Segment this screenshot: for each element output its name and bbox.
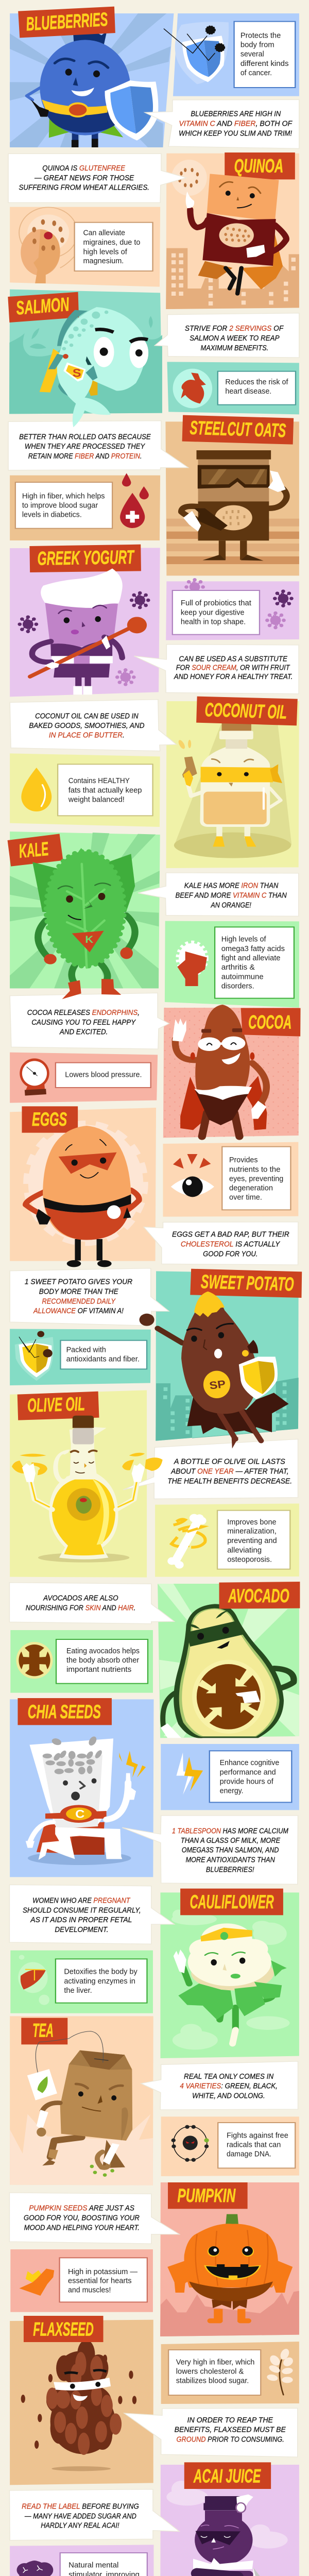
panel: liver detox fact	[10, 1951, 153, 2013]
character: cocoa hero	[173, 1005, 267, 1137]
panel: eye health fact: over time.	[229, 1194, 262, 1201]
title: olive oil: OLIVE OIL	[27, 1393, 85, 1416]
panel: nutrient absorption fact	[10, 1630, 153, 1693]
callout: pregnant women	[9, 1885, 175, 1944]
panel: olive oil hero	[10, 1390, 147, 1578]
title: eggs	[22, 1106, 78, 1133]
title: salmon: SALMON	[15, 293, 71, 319]
callout: cholesterol: CHOLESTEROL IS ACTUALLY	[181, 1240, 281, 1248]
callout: recommended daily allowance: 1 SWEET POTATO GIVES YOUR	[25, 1278, 132, 1286]
panel: migraines fact: migraines, due to	[83, 239, 140, 247]
section: olive oil	[10, 1390, 299, 1578]
section: flaxseed	[10, 2316, 299, 2485]
panel: cholesterol fact	[161, 2342, 299, 2404]
title: avocado	[219, 1582, 300, 1609]
panel: omega3 fact: disorders.	[221, 982, 254, 990]
panel: cancer protection fact: Protects the	[241, 31, 281, 40]
callout: recommended daily allowance: BODY MORE THAN THE	[39, 1288, 118, 1296]
callout: tablespoon calcium: MORE ANTIOXIDANTS THAN	[185, 1856, 275, 1864]
panel: potassium fact: and muscles!	[68, 2286, 111, 2294]
callout: skin and hair: AVOCADOS ARE ALSO	[43, 1595, 118, 1602]
callout: rolled oats comparison: WHEN THEY ARE PROCESSED THEY	[25, 443, 145, 451]
section: tea	[10, 2016, 299, 2185]
panel: cancer protection fact: body from	[241, 41, 274, 49]
callout: gluten free: SUFFERING FROM WHEAT ALLERGIES.	[19, 183, 149, 192]
callout: four varieties: WHITE, AND OOLONG.	[192, 2092, 265, 2100]
callout: skin and hair: NOURISHING FOR SKIN AND HAIR.	[26, 1604, 135, 1612]
panel: cholesterol fact: stabilizes blood sugar.	[176, 2377, 249, 2385]
callout: vitamin c and fiber: BLUEBERRIES ARE HIGH IN	[191, 110, 281, 118]
panel: kale hero	[10, 832, 160, 988]
callout: one year shelf life: ABOUT ONE YEAR — AFTER THAT,	[170, 1468, 289, 1476]
callout: read the label: HARDLY ANY REAL ACAI!	[41, 2522, 119, 2530]
panel: bone health fact: osteoporosis.	[227, 1555, 272, 1564]
panel: energy fact: performance and	[220, 1768, 276, 1776]
panel: heart disease fact: Reduces the risk of	[225, 378, 288, 386]
section: cocoa	[10, 993, 301, 1138]
panel: free radicals fact: damage DNA.	[227, 2150, 271, 2158]
callout: ground flaxseed	[124, 2408, 298, 2457]
panel: quinoa hero	[166, 154, 299, 309]
panel: bone health fact	[155, 1503, 299, 1577]
callout: read the label: — MANY HAVE ADDED SUGAR AND	[24, 2512, 136, 2520]
panel: greek yogurt hero	[10, 548, 160, 697]
callout: gluten free	[8, 154, 186, 202]
panel: tea hero	[10, 2016, 153, 2185]
panel: bone health fact: Improves bone	[227, 1518, 276, 1527]
panel: blood sugar fact: High in fiber, which helps	[22, 492, 105, 500]
character: olive oil hero	[12, 1416, 163, 1560]
title: quinoa	[225, 152, 295, 179]
character: chia seed hero: C	[75, 1808, 84, 1821]
panel: mental stimulator fact	[10, 2545, 153, 2576]
callout: gluten free: QUINOA IS GLUTENFREE	[42, 164, 125, 173]
panel: bone health fact: alleviating	[227, 1546, 262, 1554]
callout: pregnant women: SHOULD CONSUME IT REGULARLY,	[23, 1906, 141, 1914]
panel: cancer protection fact: of cancer.	[241, 69, 272, 77]
panel: blood sugar fact	[10, 473, 160, 540]
section: salmon	[8, 290, 299, 427]
panel: omega3 fact: omega3 fatty acids	[221, 945, 285, 953]
section: sweet potato	[10, 1268, 302, 1449]
title: pumpkin	[168, 2182, 248, 2209]
callout: endorphins: CAUSING YOU TO FEEL HAPPY	[31, 1019, 136, 1027]
title: flaxseed: FLAXSEED	[33, 2318, 94, 2340]
panel: energy fact	[161, 1744, 299, 1810]
callout: in place of butter: BAKED GOODS, SMOOTHIES, AND	[29, 722, 144, 730]
callout: pumpkin seeds: PUMPKIN SEEDS ARE JUST AS	[29, 2205, 134, 2212]
character: chia seed hero	[26, 1735, 136, 1860]
character: tea bag hero	[27, 2031, 132, 2177]
panel: coconut oil hero	[166, 701, 299, 868]
character: salmon hero: S	[73, 367, 81, 380]
callout: pregnant women: AS IT AIDS IN PROPER FETAL	[30, 1916, 132, 1924]
panel: probiotics fact: keep your digestive	[181, 608, 244, 617]
panel: acai hero	[160, 2465, 299, 2576]
callout: two servings: MAXIMUM BENEFITS.	[201, 344, 268, 352]
section: eggs	[10, 1106, 298, 1267]
callout: in place of butter: IN PLACE OF BUTTER.	[49, 732, 125, 739]
title: acai juice	[184, 2462, 271, 2489]
panel: liver detox fact: the liver.	[64, 1987, 92, 1995]
callout: two servings: SALMON A WEEK TO REAP	[190, 334, 280, 343]
title: tea	[21, 2018, 67, 2044]
callout: vitamin c and fiber: VITAMIN C AND FIBER, BOTH OF	[179, 120, 293, 128]
title: greek yogurt	[29, 545, 141, 572]
callout: one year shelf life: A BOTTLE OF OLIVE OIL LASTS	[174, 1458, 285, 1466]
panel: cancer protection fact: different kinds	[241, 60, 289, 68]
panel: nutrient absorption fact: the body absorb other	[66, 1656, 139, 1665]
panel: sweet potato hero	[156, 1271, 299, 1441]
panel: migraines fact: high levels of	[83, 248, 127, 256]
section: greek yogurt	[10, 545, 299, 697]
panel: cancer protection fact: several	[241, 50, 264, 58]
section: kale	[8, 832, 299, 1008]
panel: energy fact: provide hours of	[220, 1777, 273, 1786]
panel: flaxseed hero	[10, 2320, 153, 2485]
panel: healthy fats fact	[10, 753, 160, 827]
callout: read the label	[9, 2489, 179, 2540]
title: salmon	[8, 292, 79, 323]
panel: potassium fact: essential for hearts	[68, 2277, 132, 2285]
section: avocado	[9, 1582, 300, 1738]
section: pumpkin	[9, 2182, 299, 2336]
panel: blueberries hero	[10, 13, 174, 147]
callout: four varieties: REAL TEA ONLY COMES IN	[184, 2073, 274, 2081]
callout: rolled oats comparison: BETTER THAN ROLLED OATS BECAUSE	[19, 433, 151, 441]
callout: recommended daily allowance: ALLOWANCE OF VITAMIN A!	[33, 1307, 124, 1315]
panel: omega3 fact: arthritis &	[221, 963, 255, 972]
panel: probiotics fact: Full of probiotics that	[181, 599, 252, 607]
panel: blood pressure fact: Lowers blood pressure.	[65, 1071, 142, 1079]
callout: tablespoon calcium: OMEGA3S THAN SALMON, AND	[182, 1846, 279, 1854]
panel: heart disease fact	[167, 362, 299, 414]
callout: ground flaxseed: IN ORDER TO REAP THE	[187, 2416, 273, 2425]
callout: in place of butter: COCONUT OIL CAN BE USED IN	[35, 712, 139, 720]
title: flaxseed	[24, 2316, 104, 2342]
panel: cholesterol fact: Very high in fiber, which	[176, 2358, 254, 2366]
title: cauliflower	[180, 1889, 283, 1915]
title: pumpkin: PUMPKIN	[177, 2185, 236, 2206]
character: kale hero	[32, 848, 135, 999]
panel: free radicals fact: radicals that can	[227, 2141, 281, 2149]
panel: blood sugar fact: levels in diabetics.	[22, 511, 82, 519]
section: blueberries	[10, 7, 299, 148]
panel: eggs hero	[10, 1108, 156, 1261]
panel: liver detox fact: Detoxifies the body by	[64, 1968, 138, 1976]
character: sweet potato hero	[140, 1292, 289, 1449]
panel: eye health fact: eyes, preventing	[229, 1175, 283, 1183]
callout: four varieties	[141, 2061, 298, 2110]
panel: antioxidants fact	[10, 1329, 151, 1385]
panel: antioxidants fact: antioxidants and fiber.	[66, 1355, 140, 1363]
callout: ground flaxseed: GROUND PRIOR TO CONSUMING.	[176, 2435, 284, 2444]
title: chia seeds	[18, 1698, 112, 1725]
callout: tablespoon calcium: BLUEBERRIES!	[206, 1866, 254, 1874]
title: tea: TEA	[32, 2020, 54, 2041]
panel: healthy fats fact: Contains HEALTHY	[68, 777, 130, 785]
panel: heart disease fact: heart disease.	[225, 387, 271, 396]
section: chia callout	[122, 1816, 298, 1884]
title: cocoa	[241, 1008, 301, 1037]
panel: blood sugar fact: to improve blood sugar	[22, 502, 98, 510]
panel: cancer protection fact	[164, 13, 299, 96]
character: coconut oil hero	[182, 721, 282, 846]
panel: omega3 fact: fight and alleviate	[221, 954, 281, 962]
callout: pumpkin seeds	[9, 2193, 179, 2244]
callout: recommended daily allowance: RECOMMENDED DAILY	[42, 1297, 116, 1306]
title: blueberries	[18, 7, 115, 38]
callout: sour cream substitute	[134, 645, 299, 694]
panel: migraines fact: magnesium.	[83, 257, 124, 265]
panel: blood pressure fact	[10, 1053, 158, 1103]
callout: rolled oats comparison: RETAIN MORE FIBER AND PROTEIN.	[28, 452, 142, 461]
title: blueberries: BLUEBERRIES	[25, 8, 109, 35]
title: chia seeds: CHIA SEEDS	[28, 1701, 101, 1722]
callout: endorphins: AND EXCITED.	[59, 1028, 108, 1036]
callout: two servings	[154, 313, 299, 358]
panel: probiotics fact: health in top shape.	[181, 618, 246, 626]
callout: pregnant women: WOMEN WHO ARE PREGNANT	[32, 1896, 131, 1905]
character: blueberry hero	[27, 28, 130, 147]
character: cauliflower hero	[174, 1923, 287, 2044]
callout: pumpkin seeds: MOOD AND HELPING YOUR HEART.	[24, 2224, 140, 2232]
title: kale: KALE	[18, 838, 50, 862]
callout: iron and vitamin c: AN ORANGE!	[211, 901, 251, 909]
callout: in place of butter	[10, 700, 176, 751]
panel: antioxidants fact: Packed with	[66, 1346, 106, 1354]
callout: iron and vitamin c	[138, 873, 299, 916]
character: acai bottle hero	[193, 2495, 280, 2576]
panel: potassium fact	[10, 2249, 153, 2312]
callout: tablespoon calcium: 1 TABLESPOON HAS MORE CALCIUM	[172, 1827, 289, 1835]
panel: eye health fact: nutrients to the	[229, 1165, 281, 1174]
panel: bone health fact: preventing and	[227, 1537, 277, 1545]
panel: healthy fats fact: weight balanced!	[68, 796, 125, 804]
character: quinoa hero	[171, 160, 286, 294]
panel: free radicals fact	[161, 2116, 299, 2176]
callout: pumpkin seeds: GOOD FOR YOU, BOOSTING YOUR	[24, 2214, 140, 2222]
callout: endorphins	[10, 993, 169, 1049]
panel: eye health fact: Provides	[229, 1156, 258, 1164]
callout: two servings: STRIVE FOR 2 SERVINGS OF	[185, 325, 284, 333]
callout: tablespoon calcium	[122, 1816, 298, 1884]
character: egg hero	[26, 1126, 139, 1267]
panel: liver detox fact: activating enzymes in	[64, 1977, 135, 1986]
callout: gluten free: — GREAT NEWS FOR THOSE	[34, 174, 134, 182]
character: yogurt hero	[30, 568, 147, 694]
panel: free radicals fact: Fights against free	[227, 2131, 288, 2140]
panel: potassium fact: High in potassium —	[68, 2268, 138, 2276]
panel: cocoa hero	[163, 1008, 299, 1138]
title: kale	[8, 834, 63, 867]
callout: tablespoon calcium: THAN A GLASS OF MILK, MORE	[181, 1837, 281, 1845]
callout: ground flaxseed: BENEFITS, FLAXSEED MUST BE	[175, 2426, 286, 2434]
panel: nutrient absorption fact: Eating avocados helps	[66, 1647, 140, 1655]
icon: hero shield	[105, 80, 158, 141]
section: steelcut oats	[8, 415, 299, 575]
character: avocado hero	[161, 1604, 294, 1738]
title: greek yogurt: GREEK YOGURT	[37, 546, 135, 569]
character: kale hero: K	[85, 934, 93, 945]
panel: eye health fact: degeneration	[229, 1184, 273, 1192]
panel: healthy fats fact: fats that actually keep	[68, 786, 142, 794]
callout: vitamin c and fiber	[145, 99, 299, 148]
callout: pregnant women: DEVELOPMENT.	[55, 1926, 108, 1934]
callout: read the label: READ THE LABEL BEFORE BUYING	[22, 2502, 139, 2511]
panel: avocado hero	[158, 1584, 299, 1738]
panel: omega3 fact	[165, 921, 299, 1008]
section: coconut oil	[10, 697, 299, 868]
section: quinoa	[8, 152, 299, 309]
callout: rolled oats comparison	[8, 421, 188, 470]
panel: eye health fact	[163, 1142, 298, 1217]
panel: bone health fact: mineralization,	[227, 1528, 277, 1535]
icons: probiotic germs	[18, 591, 150, 686]
callout: four varieties: 4 VARIETIES: GREEN, BLACK,	[180, 2082, 278, 2090]
character: pumpkin hero	[167, 2214, 293, 2323]
panel: salmon hero	[9, 290, 162, 414]
character: flaxseed hero	[21, 2340, 136, 2455]
panel: chia seeds hero	[10, 1699, 153, 1877]
icon: lightning bolts	[119, 1751, 146, 1777]
title: olive oil	[18, 1392, 99, 1420]
character: salmon hero	[40, 307, 148, 427]
panel: energy fact: Enhance cognitive	[220, 1759, 279, 1767]
panel: steelcut oats hero	[165, 421, 299, 575]
section: cauliflower	[9, 1885, 299, 2058]
callout: skin and hair	[9, 1583, 175, 1624]
title: eggs: EGGS	[32, 1109, 67, 1130]
callout: iron and vitamin c: KALE HAS MORE IRON THAN	[184, 882, 279, 890]
callout: one year shelf life	[123, 1439, 298, 1499]
panel: omega3 fact: autoimmune	[221, 973, 264, 981]
character: sweet potato hero: SP	[209, 1378, 227, 1392]
panel: omega3 fact: High levels of	[221, 936, 266, 943]
panel: pumpkin hero	[160, 2182, 299, 2336]
callout: cholesterol	[144, 1222, 298, 1265]
callout: recommended daily allowance	[10, 1268, 169, 1326]
callout: iron and vitamin c: BEEF AND MORE VITAMIN C THAN	[176, 891, 287, 900]
callout: endorphins: COCOA RELEASES ENDORPHINS,	[27, 1009, 140, 1017]
panel: cholesterol fact: lowers cholesterol &	[176, 2368, 244, 2376]
section: chia seeds	[10, 1698, 299, 1877]
panel: energy fact: energy.	[220, 1787, 244, 1795]
icon: oil splashes	[177, 739, 191, 750]
panel: probiotics fact	[166, 578, 299, 640]
panel: nutrient absorption fact: important nutrients	[66, 1666, 132, 1674]
section: acai juice	[9, 2462, 299, 2576]
callout: sour cream substitute: FOR SOUR CREAM, OR WITH FRUIT	[176, 664, 290, 672]
panel: mental stimulator fact: Natural mental	[68, 2562, 118, 2569]
callout: cholesterol: GOOD FOR YOU.	[203, 1250, 258, 1258]
panel: cauliflower hero	[160, 1892, 299, 2058]
panel: migraines fact	[10, 207, 160, 287]
character: steelcut oats hero	[181, 450, 287, 561]
panel: migraines fact: Can alleviate	[83, 229, 125, 237]
